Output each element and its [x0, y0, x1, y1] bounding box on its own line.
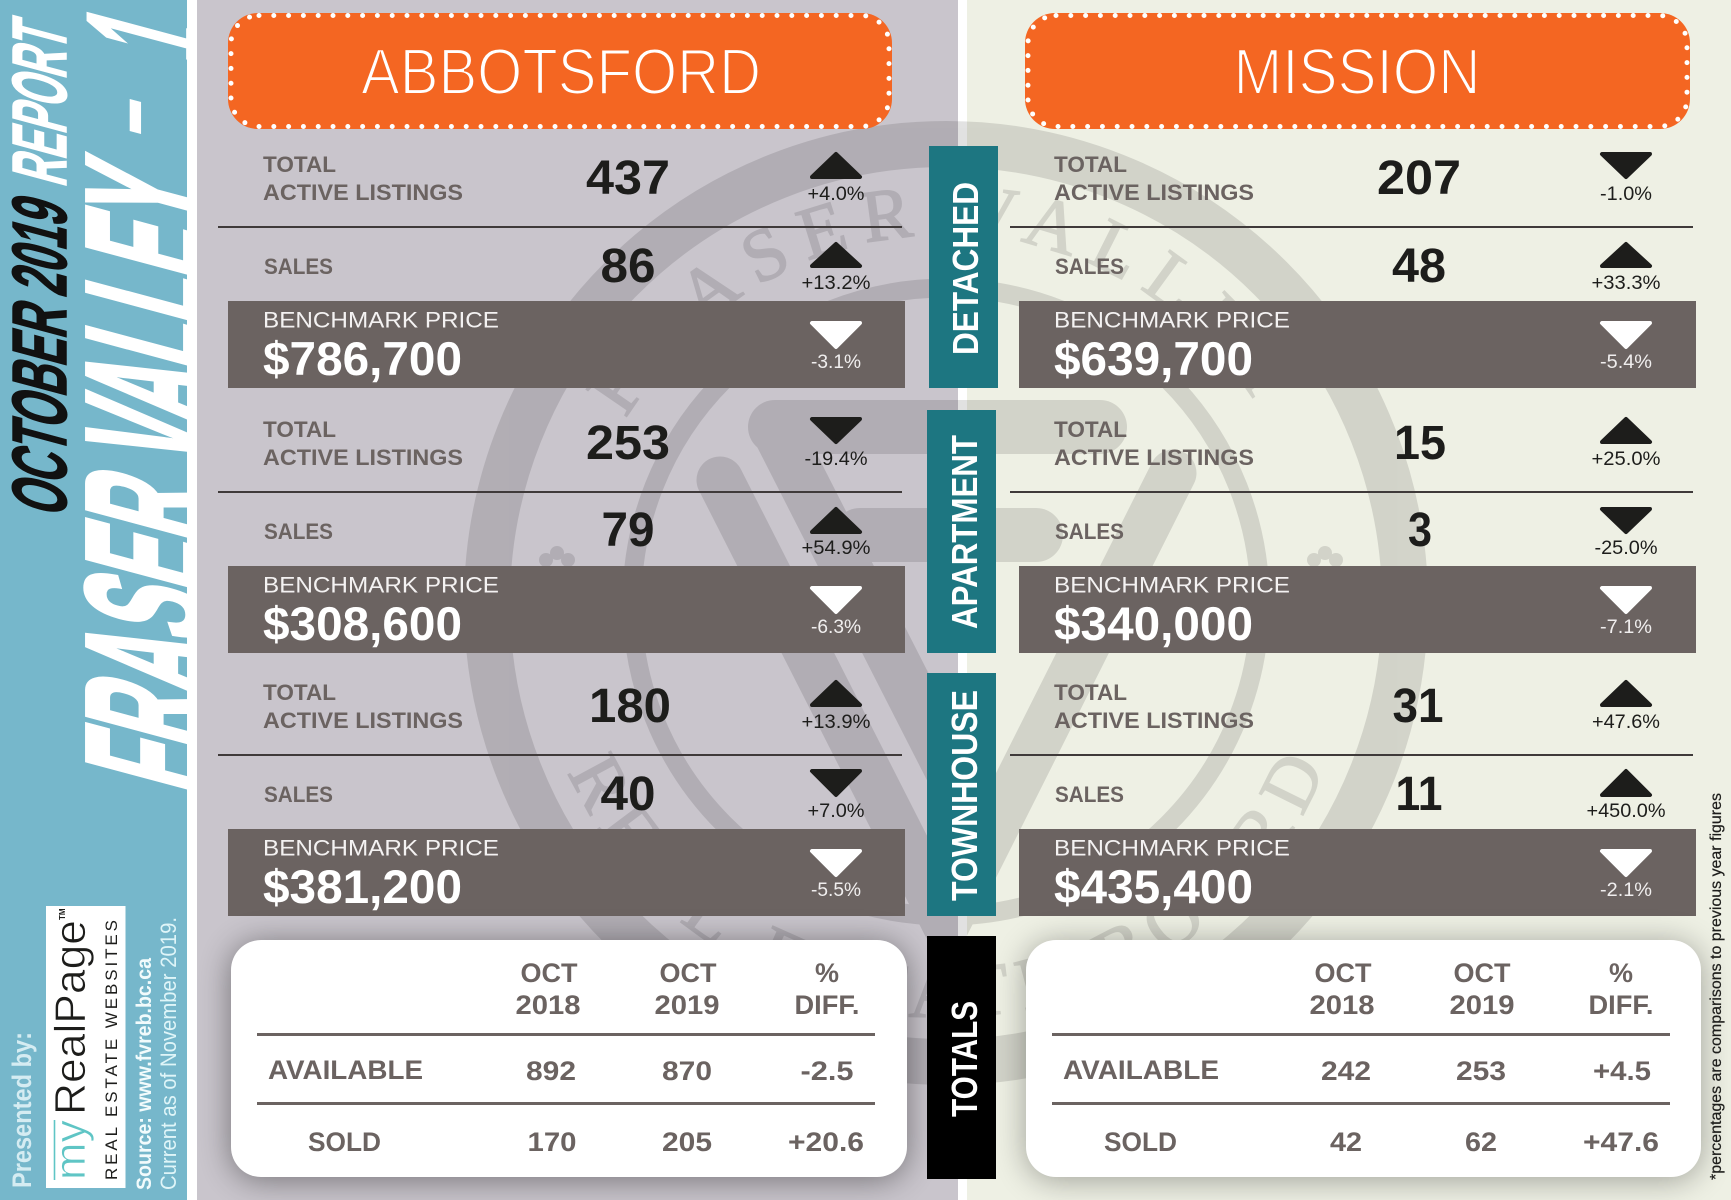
- label: total active listings: TOTAL: [263, 152, 336, 177]
- table header: 2019: [654, 990, 720, 1020]
- table header: 2018: [516, 990, 580, 1020]
- change: +7.0%: [808, 801, 865, 822]
- benchmark price: $786,700: [263, 332, 462, 385]
- table header: OCT: [660, 958, 717, 988]
- row: sold: SOLD: [308, 1127, 381, 1157]
- icon: up arrow: [1602, 771, 1650, 795]
- icon: down arrow: [1602, 323, 1650, 347]
- row: sold: 42: [1330, 1127, 1362, 1157]
- row: available: 870: [662, 1056, 712, 1086]
- label: total active listings: TOTAL: [1054, 680, 1127, 705]
- logo: myRealPage: REAL ESTATE WEBSITES: [102, 920, 121, 1180]
- row: available: +4.5: [1593, 1056, 1651, 1086]
- icon: down arrow: [812, 419, 860, 442]
- label: sales: SALES: [1055, 519, 1124, 544]
- row: sold: SOLD: [1104, 1127, 1177, 1157]
- change: -5.5%: [811, 880, 861, 901]
- change: +54.9%: [802, 538, 871, 559]
- label: total active listings: TOTAL: [1054, 417, 1127, 442]
- label: total active listings: ACTIVE LISTINGS: [263, 445, 463, 470]
- panel: Abbotsford apartment: [218, 417, 905, 653]
- row: sold: 170: [528, 1127, 576, 1157]
- panel: Abbotsford totals table: [231, 940, 907, 1180]
- benchmark box: [1019, 566, 1696, 653]
- value: 48: [1392, 240, 1446, 293]
- label: total active listings: ACTIVE LISTINGS: [1054, 445, 1254, 470]
- benchmark price: $435,400: [1054, 860, 1253, 913]
- benchmark label: BENCHMARK PRICE: [1054, 572, 1290, 598]
- change: -19.4%: [804, 449, 868, 470]
- category: Detached: [929, 146, 998, 388]
- category: Townhouse: [927, 673, 996, 916]
- watermark: Fraser Valley Real Estate Board seal: [466, 121, 1426, 1084]
- value: 86: [600, 240, 656, 293]
- icon: up arrow: [1602, 682, 1650, 705]
- footnote: *percentages are comparisons to previous year figures: [1708, 793, 1725, 1180]
- table header: 2019: [1450, 990, 1514, 1020]
- panel: Abbotsford townhouse: [218, 680, 905, 916]
- value: 79: [602, 504, 654, 557]
- row: available: 242: [1321, 1056, 1371, 1086]
- source: Source: www.fvreb.bc.ca: [133, 958, 156, 1190]
- label: total active listings: ACTIVE LISTINGS: [1054, 708, 1254, 733]
- value: 180: [589, 680, 671, 733]
- heading: Mission: [1025, 13, 1690, 129]
- value: 31: [1392, 680, 1444, 733]
- change: +25.0%: [1592, 449, 1661, 470]
- label: total active listings: TOTAL: [263, 417, 336, 442]
- icon: up arrow: [812, 244, 860, 266]
- row: sold: 62: [1465, 1127, 1497, 1157]
- value: 11: [1396, 768, 1442, 821]
- category: Townhouse: TOWNHOUSE: [944, 690, 985, 901]
- row: sold: 205: [662, 1127, 712, 1157]
- table header: DIFF.: [794, 990, 860, 1020]
- table header: %: [1609, 958, 1633, 988]
- label: total active listings: ACTIVE LISTINGS: [263, 708, 463, 733]
- watermark: Fraser Valley Real Estate Board seal: REAL ESTATE BOARD: [567, 750, 1318, 1018]
- benchmark box: [228, 301, 905, 388]
- label: total active listings: TOTAL: [263, 680, 336, 705]
- presented by: Presented by:: [7, 1032, 37, 1188]
- benchmark label: BENCHMARK PRICE: [1054, 836, 1290, 860]
- change: +13.2%: [802, 273, 871, 294]
- change: +450.0%: [1586, 801, 1666, 822]
- heading: Mission: MISSION: [1234, 35, 1480, 108]
- label: total active listings: TOTAL: [1054, 152, 1127, 177]
- icon: up arrow: [812, 682, 860, 705]
- benchmark box: [1019, 829, 1696, 916]
- label: total active listings: ACTIVE LISTINGS: [263, 180, 463, 205]
- row: sold: [308, 1127, 864, 1157]
- panel: Mission apartment: [1010, 417, 1696, 653]
- table header: [1310, 958, 1654, 1020]
- row: available: AVAILABLE: [1063, 1055, 1219, 1085]
- value: 253: [586, 417, 670, 470]
- benchmark label: BENCHMARK PRICE: [263, 308, 499, 332]
- panel: Mission totals table: [1026, 940, 1701, 1180]
- change: -2.1%: [1600, 880, 1652, 901]
- row: sold: [1104, 1127, 1659, 1157]
- value: 15: [1394, 417, 1446, 470]
- benchmark label: BENCHMARK PRICE: [263, 572, 499, 598]
- label: total active listings: ACTIVE LISTINGS: [1054, 180, 1254, 205]
- icon: down arrow: [812, 323, 860, 347]
- change: +13.9%: [802, 712, 871, 733]
- label: sales: SALES: [1055, 782, 1124, 807]
- table header: OCT: [520, 958, 578, 988]
- change: -1.0%: [1600, 184, 1652, 205]
- label: sales: SALES: [264, 519, 333, 544]
- main title: [83, 12, 187, 790]
- benchmark label: BENCHMARK PRICE: [263, 836, 499, 860]
- category: Detached: DETACHED: [945, 182, 986, 355]
- icon: down arrow: [812, 588, 860, 612]
- change: -25.0%: [1594, 538, 1658, 559]
- category: Apartment: APARTMENT: [944, 435, 985, 629]
- label: sales: SALES: [1055, 254, 1124, 279]
- table header: 2018: [1310, 990, 1374, 1020]
- current as of: Current as of November 2019.: [156, 917, 181, 1190]
- change: -5.4%: [1600, 352, 1652, 373]
- category: Apartment: [927, 410, 996, 653]
- label: sales: SALES: [264, 254, 333, 279]
- value: 3: [1408, 504, 1432, 557]
- table header: OCT: [1454, 958, 1511, 988]
- benchmark price: $308,600: [263, 597, 462, 650]
- change: -7.1%: [1600, 617, 1652, 638]
- panel: Abbotsford detached: [218, 152, 905, 388]
- logo: myRealPage: TM: [58, 908, 67, 920]
- value: 437: [586, 152, 670, 205]
- main title: -: [75, 79, 181, 150]
- icon: up arrow: [1602, 419, 1650, 442]
- change: +33.3%: [1592, 273, 1661, 294]
- table header: [516, 958, 860, 1020]
- icon: up arrow: [812, 154, 860, 177]
- row: sold: +20.6: [788, 1127, 864, 1157]
- benchmark box: [1019, 301, 1696, 388]
- logo: myRealPage: my: [46, 1120, 95, 1180]
- row: available: 253: [1456, 1056, 1506, 1086]
- logo: myRealPage: [46, 906, 126, 1188]
- icon: up arrow: [812, 509, 860, 532]
- row: sold: +47.6: [1583, 1127, 1659, 1157]
- row: available: -2.5: [800, 1056, 854, 1086]
- row: available: [268, 1055, 854, 1086]
- benchmark box: [228, 566, 905, 653]
- watermark: Fraser Valley Real Estate Board seal: FRASER VALLEY: [586, 190, 1256, 418]
- icon: down arrow: [812, 851, 860, 875]
- logo: myRealPage: RealPage: [46, 920, 95, 1115]
- icon: down arrow: [1602, 588, 1650, 612]
- table header: DIFF.: [1588, 990, 1654, 1020]
- category: Totals: TOTALS: [944, 1001, 985, 1117]
- benchmark price: $340,000: [1054, 597, 1253, 650]
- label: sales: SALES: [264, 782, 333, 807]
- heading: Abbotsford: ABBOTSFORD: [361, 35, 761, 108]
- icon: down arrow: [812, 771, 860, 795]
- benchmark box: [228, 829, 905, 916]
- icon: down arrow: [1602, 509, 1650, 532]
- sidebar: [0, 0, 187, 1200]
- change: -3.1%: [811, 352, 861, 373]
- panel: Mission detached: [1010, 152, 1696, 388]
- benchmark label: BENCHMARK PRICE: [1054, 308, 1290, 332]
- value: 207: [1377, 152, 1461, 205]
- table header: OCT: [1314, 958, 1372, 988]
- row: available: 892: [526, 1056, 576, 1086]
- change: +4.0%: [808, 184, 865, 205]
- table header: %: [815, 958, 839, 988]
- value: 40: [600, 768, 656, 821]
- benchmark price: $381,200: [263, 860, 462, 913]
- benchmark price: $639,700: [1054, 332, 1253, 385]
- category: Totals: [927, 936, 996, 1179]
- icon: down arrow: [1602, 851, 1650, 875]
- change: -6.3%: [811, 617, 861, 638]
- change: +47.6%: [1592, 712, 1660, 733]
- panel: Mission townhouse: [1010, 680, 1696, 916]
- icon: up arrow: [1602, 244, 1650, 266]
- row: available: AVAILABLE: [268, 1055, 423, 1085]
- row: available: [1063, 1055, 1651, 1086]
- icon: down arrow: [1602, 154, 1650, 177]
- heading: Abbotsford: [228, 13, 892, 129]
